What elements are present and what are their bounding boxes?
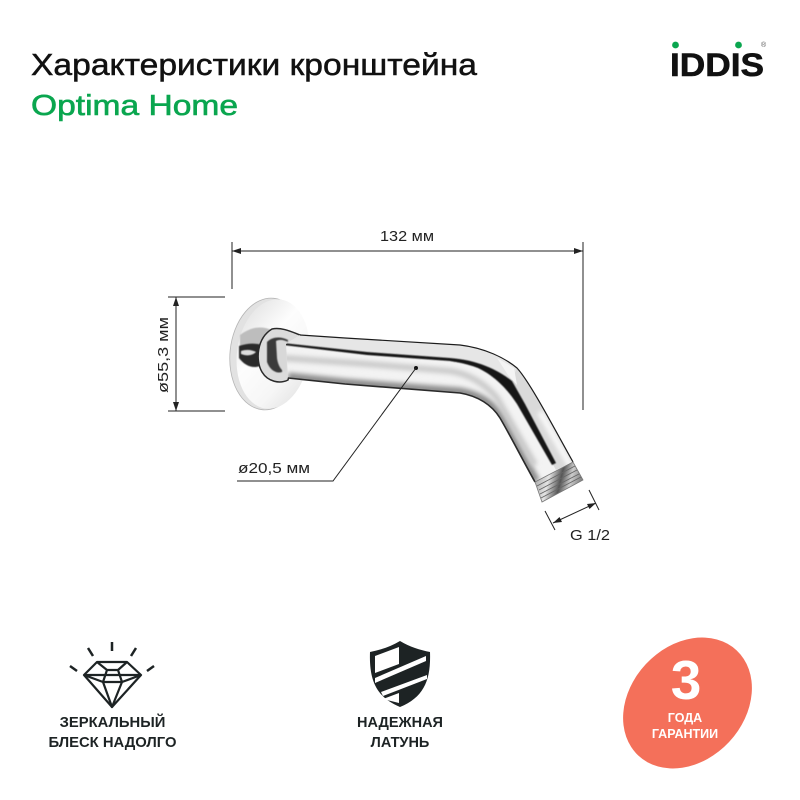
icon: wall collar [258, 329, 300, 382]
icon: diamond [70, 642, 154, 707]
warranty badge [597, 611, 778, 795]
icon: flange [224, 294, 316, 414]
icon: threaded end [535, 462, 583, 502]
dimension: 132 mm: 132 мм [380, 228, 434, 245]
caption: mirror shine: ЗЕРКАЛЬНЫЙ [60, 715, 165, 731]
dimension: diameter 55.3 mm [155, 297, 225, 411]
title: Характеристики кронштейна [31, 47, 478, 82]
logo: IDDIS: IDDIS [670, 47, 764, 83]
logo: IDDIS: ® [761, 41, 767, 49]
dimension: diameter 20.5 mm leader [237, 366, 418, 481]
warranty badge: ГОДА [668, 711, 702, 725]
icon: shield [370, 641, 430, 707]
dimension: G 1/2 [545, 490, 610, 544]
subtitle: Optima Home [31, 90, 238, 122]
icon: shower arm pipe [286, 334, 574, 482]
dimension: diameter 55.3 mm: ø55,3 мм [155, 317, 172, 393]
warranty badge: ГАРАНТИИ [652, 727, 718, 741]
dimension: diameter 20.5 mm leader: ø20,5 мм [238, 460, 310, 477]
caption: reliable brass: ЛАТУНЬ [371, 735, 429, 751]
dimension: 132 mm [232, 228, 583, 410]
caption: mirror shine: БЛЕСК НАДОЛГО [48, 735, 177, 751]
caption: reliable brass [357, 715, 443, 751]
warranty badge: 3 [671, 649, 701, 711]
dimension: G 1/2: G 1/2 [570, 527, 610, 544]
caption: reliable brass: НАДЕЖНАЯ [357, 715, 443, 731]
caption: mirror shine [48, 714, 177, 751]
